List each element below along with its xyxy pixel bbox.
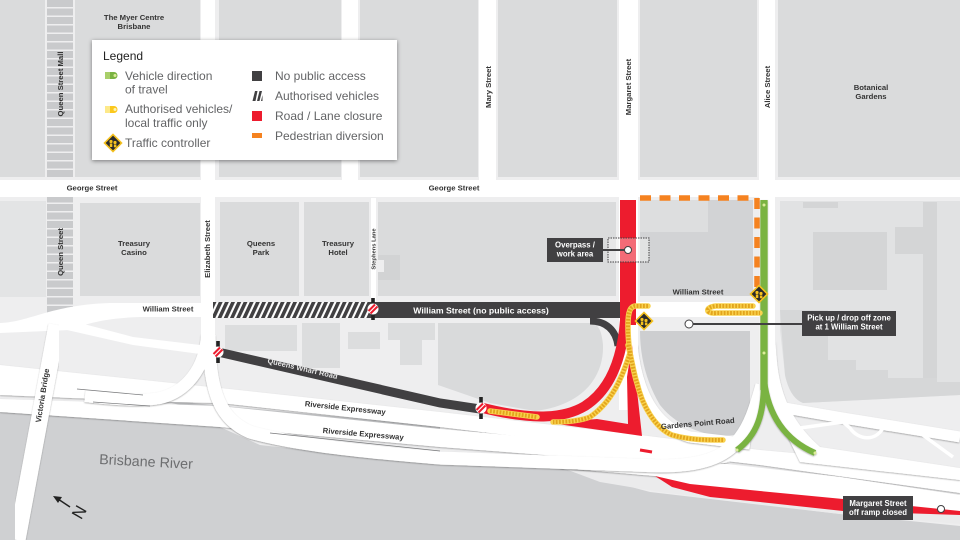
- street and place labels: George Street: [67, 184, 118, 192]
- street and place labels: Margaret Street: [624, 58, 633, 115]
- street and place labels: Alice Street: [763, 65, 772, 108]
- street and place labels: Riverside Expressway: [304, 399, 387, 417]
- road closure markers: [212, 298, 486, 419]
- street and place labels: Victoria Bridge: [34, 367, 51, 423]
- callout: Margaret Street off ramp closed: off ramp closed: [849, 508, 907, 517]
- right-hand blocks: [780, 201, 960, 403]
- callout: Margaret Street off ramp closed: Margaret Street: [849, 499, 907, 508]
- river: [0, 412, 960, 540]
- callout: overpass work area: work area: [556, 250, 594, 258]
- pale land under ramp: [560, 467, 960, 524]
- street and place labels: Mary Street: [484, 66, 493, 108]
- street and place labels: Gardens: [855, 92, 887, 101]
- legend title: Legend: [103, 49, 143, 63]
- callout: overpass work area: Overpass /: [555, 240, 596, 250]
- Victoria Bridge road: [17, 325, 57, 540]
- street and place labels: The Myer Centre: [104, 13, 165, 22]
- road label: Queens Wharf Road: Queens Wharf Road: [267, 356, 339, 381]
- red road closures: [483, 200, 960, 515]
- paths in right land: [800, 422, 953, 457]
- ramps and curved roads: [85, 335, 960, 480]
- roads: [0, 365, 960, 512]
- street and place labels: Botanical: [854, 83, 888, 92]
- dark grey no public access road: [370, 302, 621, 346]
- street and place labels: William Street: [673, 288, 724, 296]
- authorised vehicles hatch: [213, 302, 370, 318]
- street and place labels: Queen Street Mall: [56, 52, 65, 116]
- legend item: authorised vehicles: Authorised vehicles: [275, 89, 379, 103]
- callout: pick up drop off zone: at 1 William Street: [815, 322, 883, 332]
- legend item: authorised vehicles local traffic: Authorised vehicles/: [125, 102, 233, 116]
- Queens Wharf Road: [218, 352, 480, 409]
- legend item: authorised vehicles local traffic: local traffic only: [125, 116, 207, 130]
- street and place labels: Queens: [247, 239, 275, 248]
- panel: legend: [92, 40, 397, 160]
- legend item: road lane closure: Road / Lane closure: [275, 109, 383, 123]
- legend item: vehicle direction: [105, 69, 212, 96]
- street and place labels: Park: [253, 248, 270, 257]
- street and place labels: Treasury: [322, 239, 355, 248]
- Queen Street Mall stripes: [47, 0, 73, 317]
- north arrow: N: [68, 502, 91, 522]
- yellow authorised vehicle routes: [490, 306, 760, 440]
- expressway edge lines: [77, 389, 440, 451]
- street and place labels: George Street: [429, 184, 480, 192]
- legend item: traffic controller: [103, 133, 210, 153]
- expressway gap: [160, 400, 440, 433]
- legend item: traffic controller: Traffic controller: [125, 136, 210, 150]
- upper city blocks: [0, 0, 960, 177]
- callout: Margaret Street off ramp closed: [843, 496, 944, 520]
- callout: pick up drop off zone: [685, 311, 896, 336]
- legend item: no public access: No public access: [275, 69, 366, 83]
- pedestrian diversion: [640, 198, 757, 290]
- street and place labels: Riverside Expressway: [322, 426, 405, 442]
- street and place labels: Elizabeth Street: [203, 220, 212, 278]
- road label: William Street (no public access): William Street (no public access): [413, 306, 549, 316]
- callout: overpass work area: [547, 238, 649, 262]
- street and place labels: Brisbane: [118, 22, 151, 31]
- green vehicle direction route: [736, 200, 816, 454]
- street and place labels: Hotel: [328, 248, 348, 257]
- lower city blocks: [0, 200, 753, 436]
- north arrow: [53, 496, 91, 522]
- street and place labels: Gardens Point Road: [661, 416, 735, 431]
- legend item: authorised vehicles local traffic: [105, 102, 233, 130]
- river label: Brisbane River: [99, 452, 193, 473]
- legend item: pedestrian diversion: Pedestrian diversion: [275, 129, 384, 143]
- legend item: vehicle direction: Vehicle direction: [125, 69, 212, 83]
- callout: pick up drop off zone: Pick up / drop off zone: [807, 314, 891, 322]
- street and place labels: Stephens Lane: [372, 228, 378, 270]
- street and place labels: Treasury: [118, 239, 151, 248]
- street and place labels: Queen Street: [56, 228, 65, 276]
- street and place labels: William Street: [143, 304, 194, 314]
- traffic controller signs: [634, 284, 769, 331]
- street and place labels: Casino: [121, 248, 147, 257]
- streets: [0, 0, 960, 410]
- street and place labels: [34, 13, 888, 442]
- legend item: vehicle direction: of travel: [125, 82, 168, 96]
